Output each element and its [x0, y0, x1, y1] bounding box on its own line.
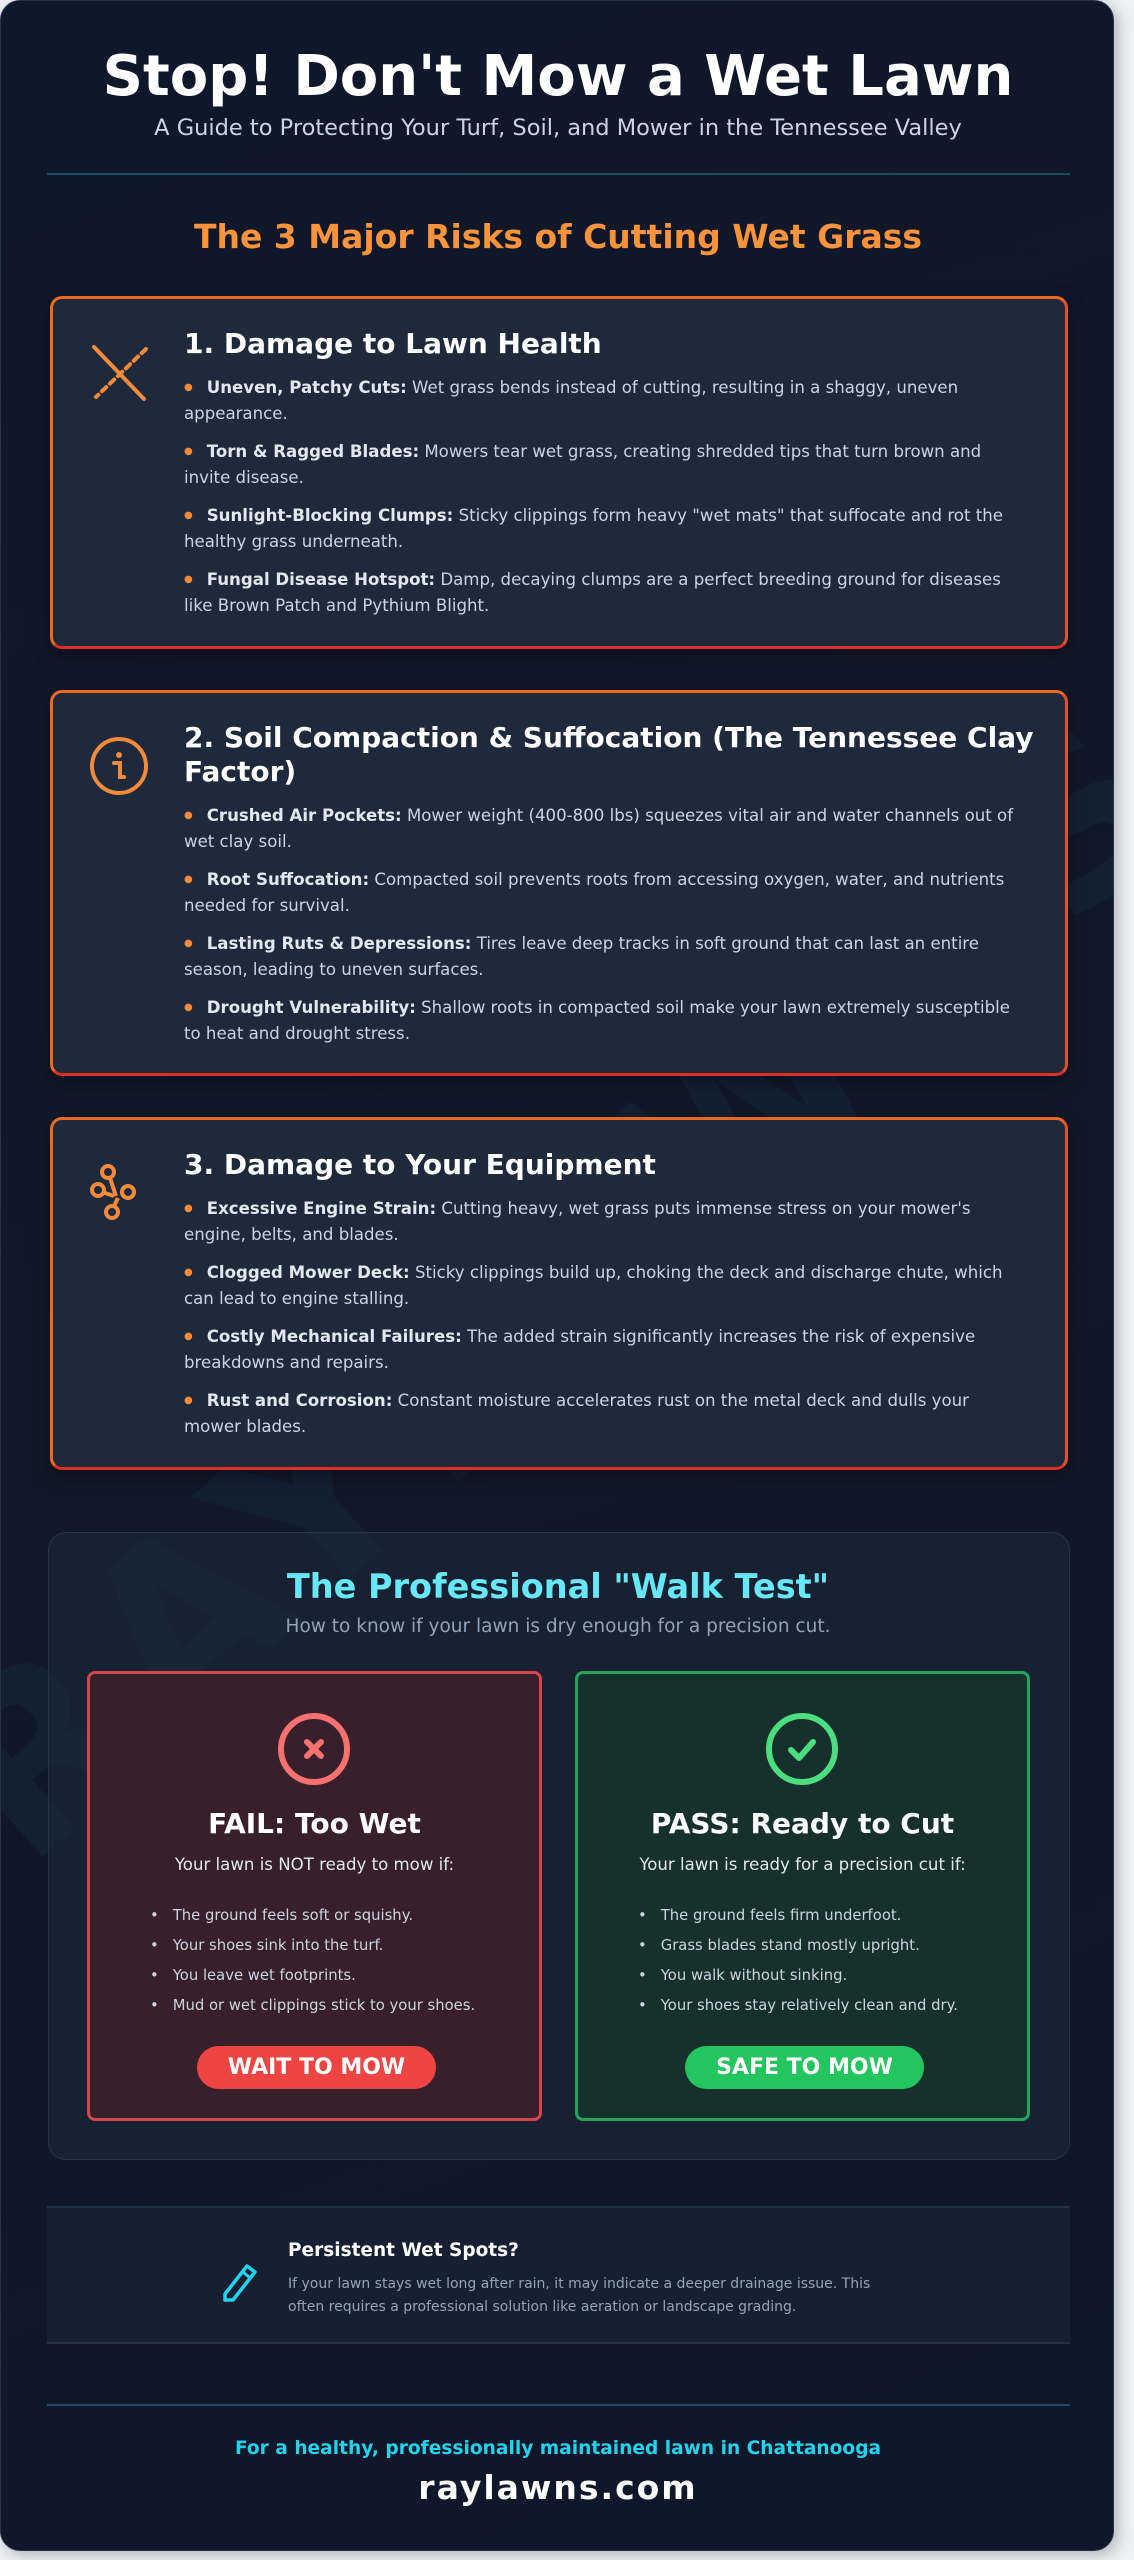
callout text: If your lawn stays wet long after rain, it may indicate a deeper drainage issue. This often requires a professional solution like aeration or landscape grading.	[288, 2276, 870, 2315]
panel: risk 3 equipment	[50, 1117, 1068, 1470]
fail intro: Your lawn is NOT ready to mow if:	[175, 1855, 454, 1874]
icon: info	[90, 737, 148, 795]
heading: 2. Soil Compaction & Suffocation (The Tennessee Clay Factor)	[184, 721, 1033, 788]
footer tagline: For a healthy, professionally maintained lawn in Chattanooga	[235, 2438, 881, 2459]
bullet list: ● Crushed Air Pockets: Mower weight (400-800 lbs) squeezes vital air and water channels out of wet clay soil.	[184, 806, 1013, 851]
pass list: • Your shoes stay relatively clean and dry.	[638, 1997, 958, 2014]
pass list	[638, 1907, 958, 2014]
panel: walk test	[48, 1532, 1070, 2160]
fail list: • You leave wet footprints.	[150, 1967, 356, 1984]
icon: x circle	[278, 1713, 350, 1785]
fail list: • Mud or wet clippings stick to your shoes.	[150, 1997, 475, 2014]
bullet list: ● Clogged Mower Deck: Sticky clippings build up, choking the deck and discharge chute, which can lead to engine stalling.	[184, 1263, 1002, 1308]
fail list	[150, 1907, 475, 2014]
icon: cut grass	[92, 344, 148, 402]
heading: 3. Damage to Your Equipment	[184, 1148, 656, 1181]
button: safe: SAFE TO MOW	[716, 2055, 893, 2080]
button: wait	[197, 2046, 436, 2089]
bullet list: ● Excessive Engine Strain: Cutting heavy, wet grass puts immense stress on your mower's engine, belts, and blades.	[184, 1199, 970, 1244]
pass intro: Your lawn is ready for a precision cut if:	[639, 1855, 966, 1874]
fail list: • The ground feels soft or squishy.	[150, 1907, 413, 1924]
icon: pencil	[223, 2264, 257, 2302]
pass list: • The ground feels firm underfoot.	[638, 1907, 901, 1924]
panel: fail	[87, 1671, 542, 2121]
pass title: PASS: Ready to Cut	[651, 1807, 954, 1840]
pass list: • You walk without sinking.	[638, 1967, 847, 1984]
button: wait: WAIT TO MOW	[228, 2055, 405, 2080]
bullet list	[184, 1199, 1002, 1436]
heading: walk test: The Professional "Walk Test"	[287, 1567, 829, 1606]
icon: check circle	[766, 1713, 838, 1785]
callout title: Persistent Wet Spots?	[288, 2240, 519, 2261]
icon: equipment	[90, 1164, 136, 1220]
bullet list: ● Sunlight-Blocking Clumps: Sticky clippings form heavy "wet mats" that suffocate and rot the healthy grass underneath.	[184, 506, 1003, 551]
subheading: How to know if your lawn is dry enough for a precision cut.	[286, 1616, 830, 1637]
button: safe	[685, 2046, 924, 2089]
bullet list	[184, 378, 1003, 615]
bullet list: ● Torn & Ragged Blades: Mowers tear wet grass, creating shredded tips that turn brown and invite disease.	[184, 442, 981, 487]
bullet list: ● Fungal Disease Hotspot: Damp, decaying clumps are a perfect breeding ground for diseases like Brown Patch and Pythium Blight.	[184, 570, 1001, 615]
bullet list	[184, 806, 1014, 1043]
section heading: risks: The 3 Major Risks of Cutting Wet Grass	[194, 217, 922, 256]
callout: persistent wet spots	[47, 2206, 1070, 2344]
bullet list: ● Root Suffocation: Compacted soil prevents roots from accessing oxygen, water, and nutrients needed for survival.	[184, 870, 1004, 915]
pass list: • Grass blades stand mostly upright.	[638, 1937, 920, 1954]
subtitle: A Guide to Protecting Your Turf, Soil, and Mower in the Tennessee Valley	[154, 115, 962, 141]
panel: pass	[575, 1671, 1030, 2121]
title: Stop! Don't Mow a Wet Lawn	[103, 44, 1013, 109]
panel: risk 1 lawn health	[50, 296, 1068, 649]
bullet list: ● Costly Mechanical Failures: The added strain significantly increases the risk of expensive breakdowns and repairs.	[184, 1327, 975, 1372]
heading: 1. Damage to Lawn Health	[184, 327, 602, 360]
bullet list: ● Uneven, Patchy Cuts: Wet grass bends instead of cutting, resulting in a shaggy, uneven appearance.	[184, 378, 958, 423]
footer url: raylawns.com	[418, 2468, 698, 2507]
fail title: FAIL: Too Wet	[208, 1807, 421, 1840]
bullet list: ● Rust and Corrosion: Constant moisture accelerates rust on the metal deck and dulls your mower blades.	[184, 1391, 969, 1436]
bullet list: ● Lasting Ruts & Depressions: Tires leave deep tracks in soft ground that can last an entire season, leading to uneven surfaces.	[184, 934, 979, 979]
bullet list: ● Drought Vulnerability: Shallow roots in compacted soil make your lawn extremely susceptible to heat and drought stress.	[184, 998, 1010, 1043]
panel: risk 2 soil compaction	[50, 690, 1068, 1076]
fail list: • Your shoes sink into the turf.	[150, 1937, 383, 1954]
